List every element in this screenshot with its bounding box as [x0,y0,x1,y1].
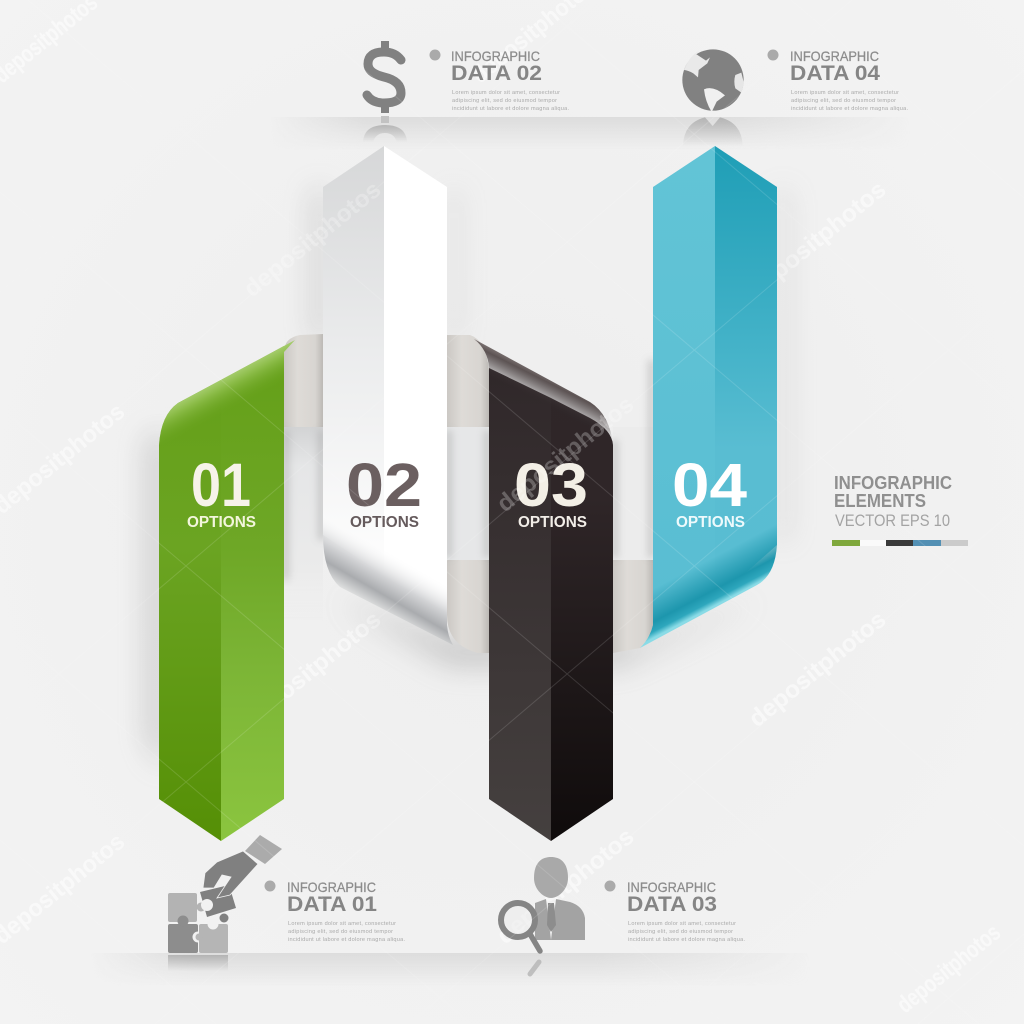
fold: 02 to 03 [447,335,489,653]
watermarks behind ribbons: depositphotos [744,606,891,733]
reflection [168,955,228,971]
reflection [363,125,407,142]
number 02: 02 [346,451,422,519]
ribbon face left [489,368,551,841]
ribbon face right [715,146,777,600]
cuff [245,835,282,864]
text block: data 02: INFOGRAPHIC [451,48,540,64]
curled bottom edge [640,520,777,648]
legend colour bar [832,540,968,546]
icon: person with magnifier [501,857,585,974]
ribbon face left [159,380,221,841]
reflection [530,962,539,974]
fold: 03 to 04 [613,427,653,653]
text block: data 04 [768,48,908,112]
fold: 01 to 02 [284,334,323,620]
curled top edge [474,339,613,470]
text block: data 03: DATA 03 [627,893,717,916]
text block: data 01: Lorem ipsum dolor sit amet, consectetur [288,921,396,927]
text block: data 03: Lorem ipsum dolor sit amet, consectetur [628,921,736,927]
text block: data 01: incididunt ut labore et dolore magna aliqua. [288,937,405,943]
icon: hand and puzzle [168,835,282,971]
watermarks behind ribbons: depositphotos [239,606,386,733]
ribbon face right [551,398,613,841]
floor band: top [307,117,840,138]
label options: OPTIONS [518,514,587,531]
text block: data 02: DATA 02 [451,62,542,85]
head [534,857,568,898]
number 01: 01 [191,451,251,519]
suit [535,899,585,940]
bullet [768,50,778,60]
magnifier [501,903,540,951]
bullet [430,50,440,60]
ribbon face left [323,146,384,575]
text block: data 02: Lorem ipsum dolor sit amet, consectetur [452,90,560,96]
text block: data 04: incididunt ut labore et dolore magna aliqua. [791,106,908,112]
moving puzzle piece [200,885,236,922]
panel: ribbon 04 blue [640,146,777,648]
text block: data 01: INFOGRAPHIC [287,879,376,895]
watermarks behind ribbons: depositphotos [744,176,891,303]
bullet [264,880,276,892]
icon: globe [682,49,744,146]
text block: data 04: adipiscing elit, sed do eiusmod tempor [791,98,896,104]
watermarks over ribbons [239,176,639,518]
fold side shading [282,360,655,580]
text block: data 03: incididunt ut labore et dolore magna aliqua. [628,937,745,943]
text block: data 04: INFOGRAPHIC [790,48,879,64]
label options: OPTIONS [676,514,745,531]
text block: data 01: DATA 01 [287,893,377,916]
icon: dollar [363,41,407,142]
text block: data 01 [264,879,405,943]
text block: data 03: INFOGRAPHIC [627,879,716,895]
text block: data 03: adipiscing elit, sed do eiusmod tempor [628,929,733,935]
title block: infographic elements: INFOGRAPHIC [834,472,952,493]
floor band: bottom [129,953,730,974]
title block: infographic elements: VECTOR EPS 10 [835,511,950,530]
watermarks behind ribbons: depositphotos [492,823,639,950]
ribbon face right [384,146,447,612]
curled top edge [159,340,295,470]
label options: OPTIONS [187,514,256,531]
title block: infographic elements [834,472,952,530]
text block: data 03 [604,879,745,943]
puzzle piece bottom left [168,916,204,953]
label options: OPTIONS [350,514,419,531]
hand [203,851,258,898]
watermarks over ribbons: depositphotos [239,176,386,303]
panel: ribbon 02 white [323,146,453,645]
curled bottom [323,510,453,645]
number 04: 04 [672,451,747,519]
puzzle piece top left [168,893,206,922]
title block: infographic elements: ELEMENTS [834,490,926,511]
number 03: 03 [514,451,588,519]
text block: data 02: incididunt ut labore et dolore magna aliqua. [452,106,569,112]
reflection [683,117,743,146]
panel: ribbon 01 green [159,340,295,841]
ribbon face left [653,146,715,630]
text block: data 02 [430,48,569,112]
panel: ribbon 03 black [474,339,613,841]
bullet [604,880,616,892]
text block: data 02: adipiscing elit, sed do eiusmod tempor [452,98,557,104]
text block: data 01: adipiscing elit, sed do eiusmod tempor [288,929,393,935]
puzzle piece bottom right [196,918,228,953]
text block: data 04: DATA 04 [790,62,880,85]
watermarks over ribbons: depositphotos [492,391,639,518]
panel: connecting paper folds [282,334,655,653]
ribbon shadows [148,190,788,770]
tie [547,903,556,932]
ribbon face right [221,346,284,841]
text block: data 04: Lorem ipsum dolor sit amet, consectetur [791,90,899,96]
